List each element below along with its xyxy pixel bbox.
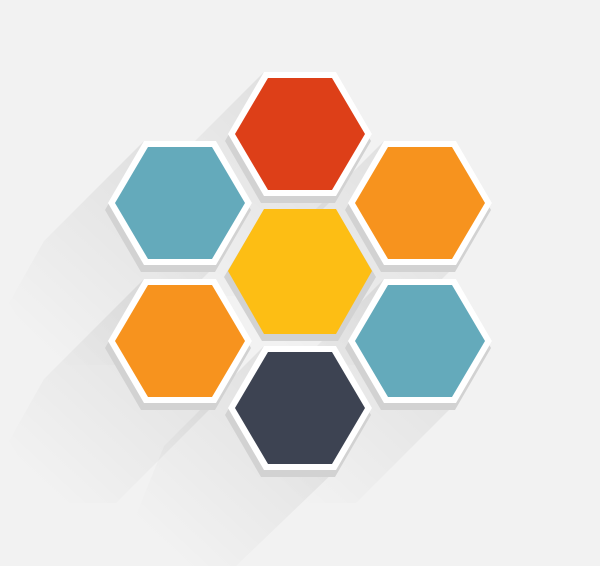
contact shadow behind cluster bbox=[105, 79, 491, 477]
hex: red top bbox=[228, 72, 372, 196]
hex: yellow center bbox=[228, 209, 372, 334]
hex: orange lower-left bbox=[108, 279, 252, 403]
hex: blue lower-right bbox=[348, 279, 492, 403]
hex: blue upper-left bbox=[108, 141, 252, 265]
hex: dark bottom bbox=[228, 346, 372, 470]
long shadows bbox=[9, 72, 492, 566]
hex: orange upper-right bbox=[348, 141, 492, 265]
